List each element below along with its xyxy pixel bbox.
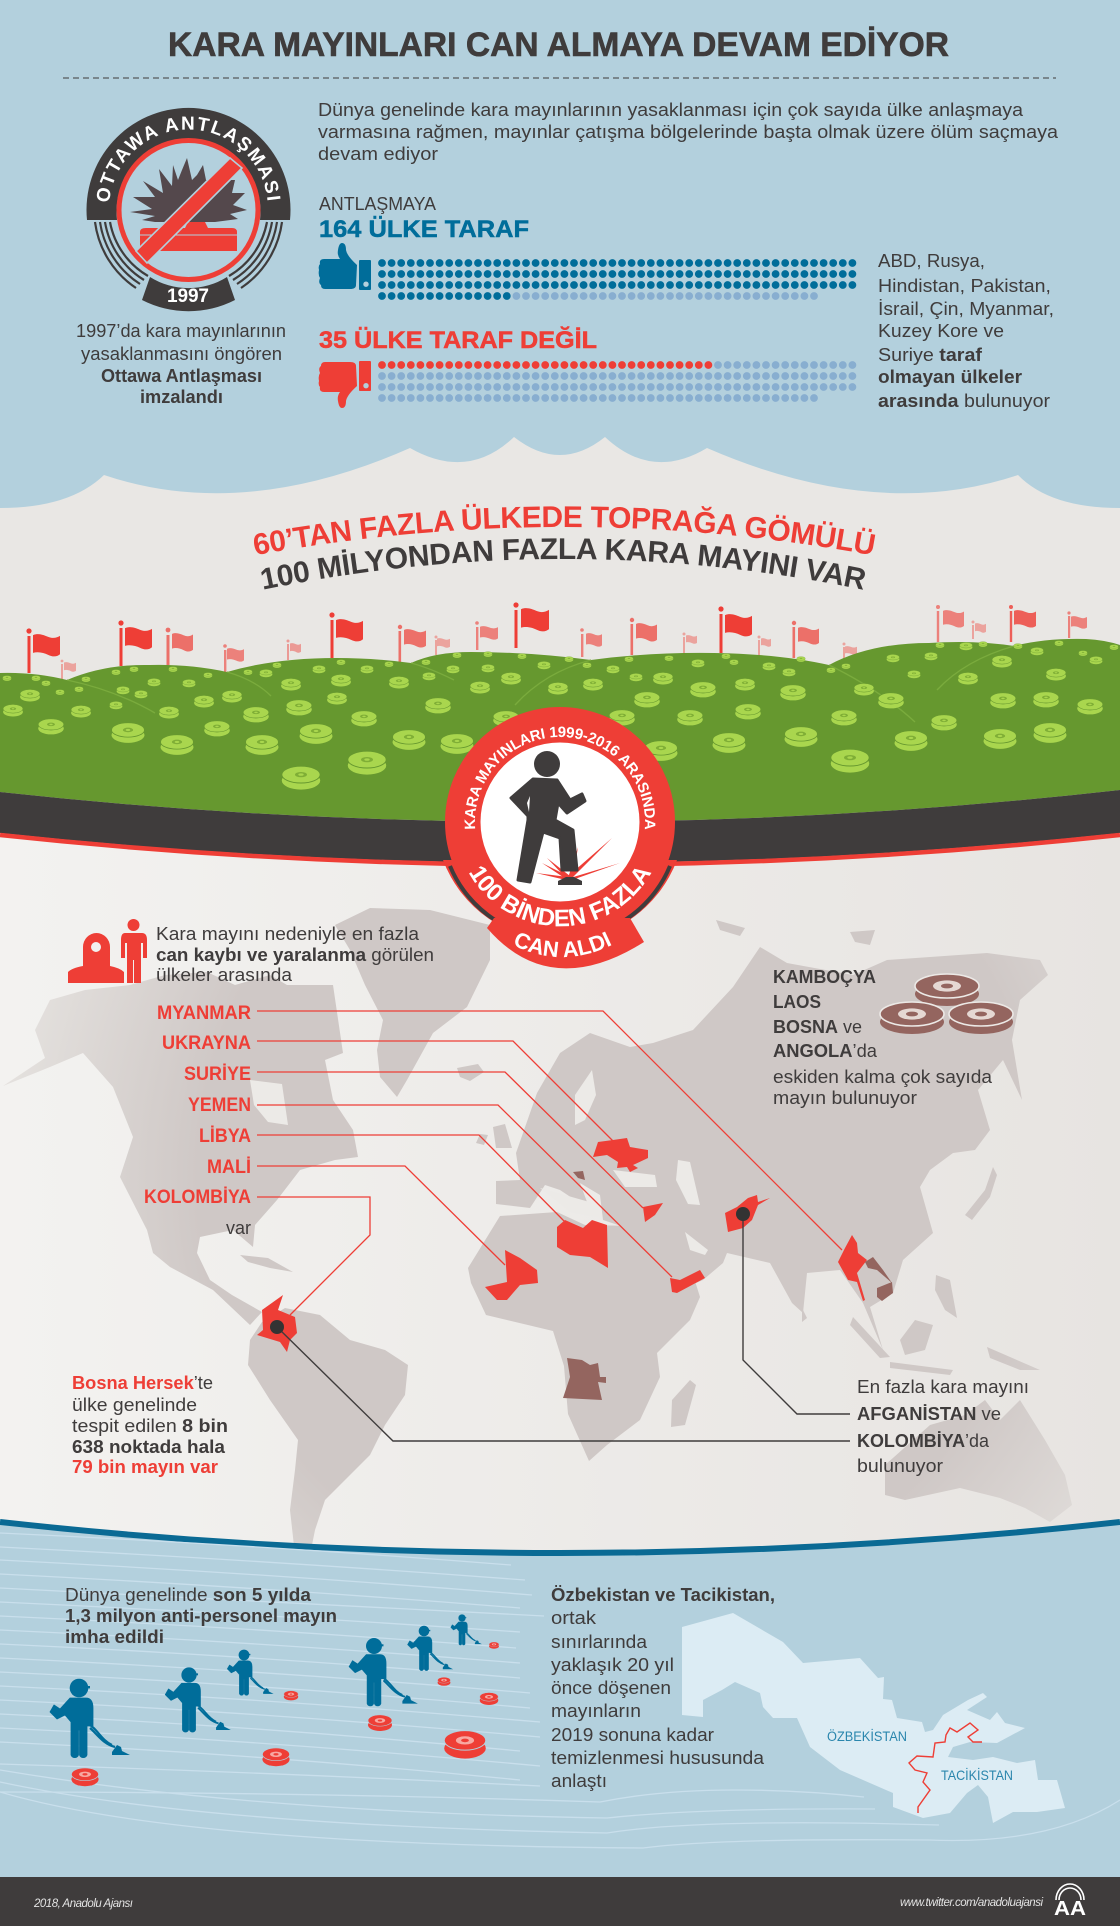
old mines text: KAMBOÇYA xyxy=(773,967,876,987)
non-party list: İsrail, Çin, Myanmar, xyxy=(878,299,1054,319)
background: lower paper section xyxy=(0,800,1120,1580)
Uzbekistan and Tajikistan map xyxy=(682,1613,1065,1823)
Eurasia xyxy=(496,947,1048,1350)
footer: 2018, Anadolu Ajansı xyxy=(33,1898,133,1910)
most mines text: En fazla kara mayını xyxy=(857,1377,1029,1397)
non-party list: Kuzey Kore ve xyxy=(878,321,1004,341)
headline: curved two lines: 100 MİLYONDAN FAZLA KARA MAYINI VAR xyxy=(261,538,865,590)
Laos xyxy=(865,1257,892,1283)
Bosnia text: tespit edilen 8 bin xyxy=(72,1416,228,1436)
Uzbekistan and Tajikistan map: TACİKİSTAN xyxy=(941,1766,1013,1783)
non-party list: Suriye taraf xyxy=(878,345,983,365)
Uzbekistan text: temizlenmesi hususunda xyxy=(551,1748,765,1768)
destroyed mines text: 1,3 milyon anti-personel mayın xyxy=(65,1606,337,1626)
country labels: UKRAYNA xyxy=(162,1033,251,1054)
red band edge xyxy=(0,835,1120,865)
casualties text: ülkeler arasında xyxy=(156,965,293,985)
casualties text: Kara mayını nedeniyle en fazla xyxy=(156,924,420,944)
dark band xyxy=(0,790,1120,863)
hill ridge lines xyxy=(67,646,1014,722)
central badge: 100 thousand casualties: 100 BİNDEN FAZLA xyxy=(469,866,652,926)
Syria xyxy=(643,1203,663,1222)
most mines text: KOLOMBİYA’da xyxy=(857,1431,990,1451)
South America xyxy=(248,1308,408,1555)
intro text xyxy=(318,100,1059,164)
central badge: 100 thousand casualties: CAN ALDI xyxy=(515,932,612,958)
intro text: varmasına rağmen, mayınlar çatışma bölgelerinde başta olmak üzere ölüm saçmaya xyxy=(318,122,1059,142)
Afghanistan xyxy=(725,1195,770,1232)
casualties text: can kaybı ve yaralanma görülen xyxy=(156,945,434,965)
non-party list: ABD, Rusya, xyxy=(878,251,985,271)
red mines xyxy=(71,1642,499,1786)
logo: AA xyxy=(1054,1884,1086,1920)
non-party list xyxy=(878,251,1054,411)
Uzbekistan and Tajikistan map: ÖZBEKİSTAN xyxy=(827,1729,907,1744)
country labels: KOLOMBİYA xyxy=(144,1187,251,1208)
footer: www.twitter.com/anadoluajansi xyxy=(900,1897,1043,1909)
Angola xyxy=(563,1358,606,1400)
old mines text xyxy=(773,967,993,1108)
Greenland xyxy=(335,908,490,1097)
wavy lines xyxy=(0,1533,1120,1848)
islands xyxy=(476,920,1078,1552)
flags xyxy=(26,602,1087,679)
red leader lines xyxy=(257,1011,842,1315)
destroyed mines text: Dünya genelinde son 5 yılda xyxy=(65,1585,312,1605)
dot chart: 164 parties xyxy=(382,263,853,296)
logo: AA: AA xyxy=(1054,1898,1086,1920)
intro text: devam ediyor xyxy=(318,144,438,164)
title: KARA MAYINLARI CAN ALMAYA DEVAM EDİYOR xyxy=(168,26,949,64)
central badge: 100 thousand casualties xyxy=(443,707,677,968)
Uzbekistan text: mayınların xyxy=(551,1701,641,1721)
Uzbekistan text: ortak xyxy=(551,1608,597,1628)
most mines text: bulunuyor xyxy=(857,1456,943,1476)
Bosnia text: Bosna Hersek’te xyxy=(72,1373,213,1393)
icon: three brown mines xyxy=(880,974,1013,1034)
non-party list: olmayan ülkeler xyxy=(878,367,1022,387)
country labels xyxy=(144,1003,251,1208)
figure stepping on a mine xyxy=(511,751,620,885)
icon: explosion xyxy=(130,158,247,222)
icon: grave and person xyxy=(68,919,147,983)
badge caption xyxy=(76,321,286,407)
badge: Ottawa treaty xyxy=(86,108,290,312)
badge caption: Ottawa Antlaşması xyxy=(101,366,262,386)
black leader lines xyxy=(270,1207,850,1441)
Uzbekistan text: yaklaşık 20 yıl xyxy=(551,1655,674,1675)
old mines text: LAOS xyxy=(773,992,821,1012)
lower blue section xyxy=(0,1522,1120,1880)
dashed divider xyxy=(63,77,1056,79)
world map xyxy=(3,908,1078,1555)
Bosnia text: 638 noktada hala xyxy=(72,1437,226,1457)
party heading: ANTLAŞMAYA xyxy=(319,194,436,214)
Bosnia text: 79 bin mayın var xyxy=(72,1457,218,1477)
intro text: Dünya genelinde kara mayınlarının yasaklanması için çok sayıda ülke anlaşmaya xyxy=(318,100,1024,120)
mines field xyxy=(3,641,1118,790)
Uzbekistan text: Özbekistan ve Tacikistan, xyxy=(551,1585,775,1605)
icon: thumbs up xyxy=(319,243,371,290)
icon: mine xyxy=(140,222,237,251)
old mines text: BOSNA ve xyxy=(773,1017,862,1037)
headline: curved two lines: 60’TAN FAZLA ÜLKEDE TOPRAĞA GÖMÜLÜ xyxy=(254,504,876,554)
icon: thumbs down xyxy=(319,361,371,408)
country labels: SURİYE xyxy=(184,1064,251,1085)
country labels: LİBYA xyxy=(199,1126,251,1147)
Bosnia xyxy=(573,1171,585,1180)
seas xyxy=(250,1070,708,1255)
non-party list: arasında bulunuyor xyxy=(878,391,1050,411)
North America xyxy=(3,972,358,1325)
badge caption: yasaklanmasını öngören xyxy=(81,344,282,364)
blue wave edge xyxy=(0,1522,1120,1553)
dot chart: 35 non-parties xyxy=(382,365,853,398)
country labels: MYANMAR xyxy=(157,1003,251,1024)
badge caption: imzalandı xyxy=(140,387,223,407)
green field xyxy=(0,639,1120,822)
badge caption: 1997’da kara mayınlarının xyxy=(76,321,286,341)
Myanmar xyxy=(838,1235,867,1301)
non-party list: Hindistan, Pakistan, xyxy=(878,276,1051,296)
old mines text: ANGOLA’da xyxy=(773,1041,878,1061)
Uzbekistan text: sınırlarında xyxy=(551,1632,648,1652)
country labels: YEMEN xyxy=(188,1095,251,1116)
old mines text: mayın bulunuyor xyxy=(773,1088,917,1108)
party count: 164 ÜLKE TARAF xyxy=(319,216,529,243)
old mines text: eskiden kalma çok sayıda xyxy=(773,1067,993,1087)
Bosnia text: ülke genelinde xyxy=(72,1395,197,1415)
Iceland xyxy=(457,1064,484,1081)
non-party count: 35 ÜLKE TARAF DEĞİL xyxy=(319,326,597,354)
Uzbekistan text xyxy=(551,1585,775,1791)
highlighted countries xyxy=(257,1138,893,1400)
country labels: MALİ xyxy=(207,1157,251,1178)
Madagascar xyxy=(671,1380,696,1427)
label suffix: var xyxy=(226,1218,251,1238)
footer xyxy=(0,1877,1120,1926)
Ukraine xyxy=(593,1138,648,1172)
destroyed mines text xyxy=(65,1585,337,1647)
Australia xyxy=(885,1400,1072,1522)
Uzbekistan text: önce döşenen xyxy=(551,1678,671,1698)
most mines text xyxy=(857,1377,1029,1476)
background: paper section with cloud edge xyxy=(0,437,1120,900)
Mali xyxy=(485,1250,538,1300)
headline: curved two lines xyxy=(254,504,876,590)
Libya xyxy=(557,1220,608,1268)
Africa xyxy=(468,1212,700,1461)
Uzbekistan text: anlaştı xyxy=(551,1771,607,1791)
most mines text: AFGANİSTAN ve xyxy=(857,1404,1001,1424)
badge: Ottawa treaty: OTTAWA ANTLAŞMASI xyxy=(96,116,280,202)
central badge: 100 thousand casualties: KARA MAYINLARI 1999-2016 ARASINDA xyxy=(464,726,656,830)
Colombia xyxy=(257,1295,297,1352)
Cambodia xyxy=(877,1282,893,1301)
Cuba xyxy=(240,1255,293,1272)
destroyed mines text: imha edildi xyxy=(65,1627,164,1647)
casualties text xyxy=(156,924,434,985)
Bosnia text xyxy=(72,1373,228,1477)
Uzbekistan text: 2019 sonuna kadar xyxy=(551,1725,714,1745)
deminers xyxy=(50,1614,482,1758)
Yemen xyxy=(670,1270,705,1293)
badge: Ottawa treaty: 1997 xyxy=(167,286,209,307)
